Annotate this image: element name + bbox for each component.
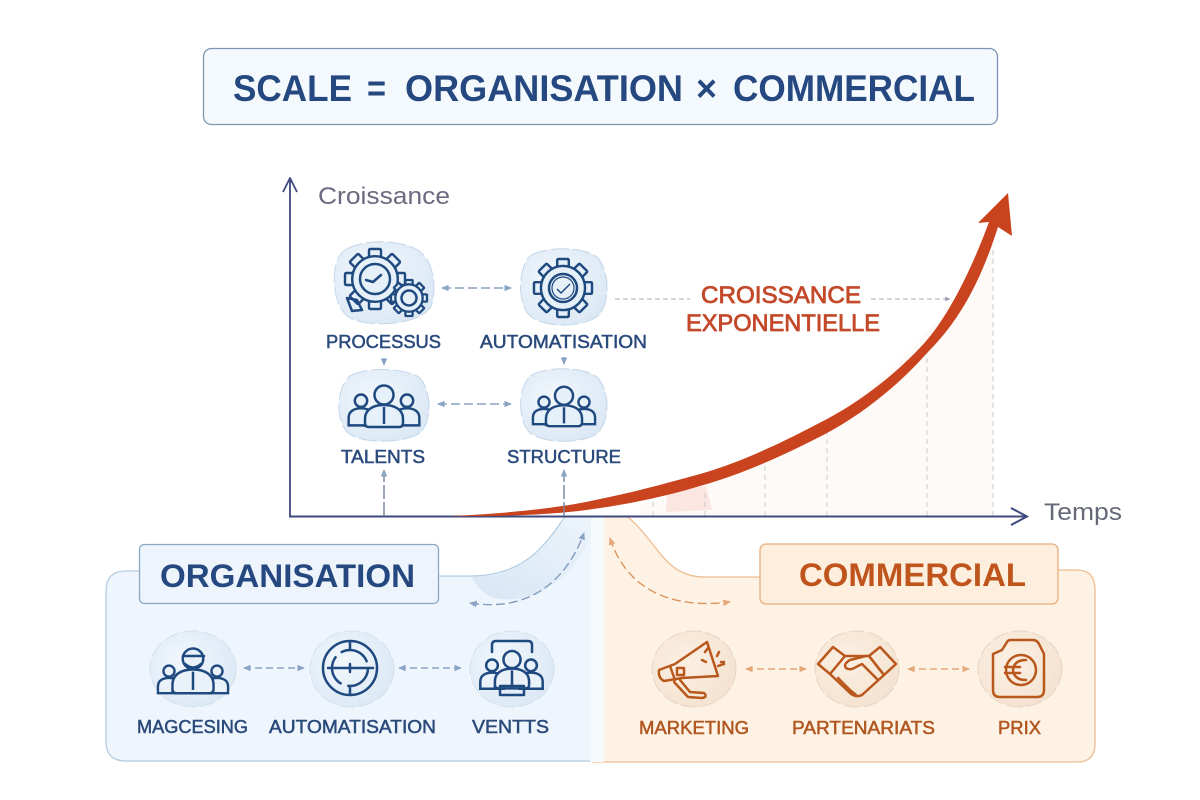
panel header: organisation: ORGANISATION bbox=[160, 558, 415, 594]
x axis bbox=[289, 508, 1027, 525]
panel: organisation outline bbox=[106, 517, 590, 761]
node: talents bbox=[339, 369, 429, 467]
chart: exponential growth bbox=[283, 178, 1122, 526]
item: partenariats bbox=[792, 631, 935, 738]
y axis bbox=[283, 178, 297, 517]
node: processus bbox=[326, 242, 441, 352]
label: AUTOMATISATION bbox=[480, 332, 647, 352]
title: ORGANISATION bbox=[405, 68, 683, 109]
title: = bbox=[367, 68, 386, 109]
label: TALENTS bbox=[341, 447, 425, 467]
label: PRIX bbox=[998, 718, 1041, 738]
node: structure bbox=[507, 369, 621, 467]
label: PROCESSUS bbox=[326, 332, 441, 352]
node: automatisation bbox=[480, 249, 647, 352]
label: MAGCESING bbox=[137, 717, 248, 737]
pink marker bbox=[666, 486, 712, 512]
strip between panels bbox=[591, 516, 604, 762]
curved arrow: commercial bbox=[610, 538, 730, 603]
curved arrow: organisation bbox=[470, 533, 584, 605]
panel: commercial outline bbox=[592, 517, 1095, 762]
time grid dashes bbox=[653, 245, 993, 516]
connector wedge: organisation to chart bbox=[472, 517, 591, 599]
title bbox=[204, 48, 998, 124]
arrows: commercial items bbox=[746, 668, 969, 670]
item: marcessing bbox=[137, 631, 248, 737]
panel: organisation background bbox=[106, 516, 591, 762]
x axis label: Temps bbox=[1044, 499, 1122, 526]
curve label bbox=[686, 282, 880, 337]
item: automatisation bbox=[269, 631, 436, 737]
panel header: organisation bbox=[140, 544, 438, 604]
arrows between chart nodes bbox=[384, 288, 564, 516]
label: VENTTS bbox=[472, 717, 549, 737]
title: COMMERCIAL bbox=[733, 68, 975, 109]
curve label: EXPONENTIELLE bbox=[686, 310, 880, 337]
growth curve arrow bbox=[450, 193, 1012, 516]
panel: commercial background bbox=[590, 516, 1095, 762]
item: prix bbox=[978, 631, 1062, 738]
panel header: commercial bbox=[760, 544, 1058, 604]
curve label: CROISSANCE bbox=[701, 282, 861, 309]
y axis label: Croissance bbox=[318, 183, 450, 210]
title: SCALE bbox=[233, 68, 352, 109]
label: MARKETING bbox=[639, 718, 749, 738]
title: × bbox=[696, 68, 717, 109]
item: ventes bbox=[470, 631, 554, 737]
arrows: organisation items bbox=[244, 667, 461, 669]
area under curve bbox=[640, 245, 993, 516]
label: AUTOMATISATION bbox=[269, 717, 436, 737]
panel header: commercial: COMMERCIAL bbox=[799, 557, 1026, 593]
dashed leaders to curve bbox=[615, 298, 950, 300]
label: STRUCTURE bbox=[507, 447, 621, 467]
label: PARTENARIATS bbox=[792, 718, 935, 738]
item: marketing bbox=[639, 631, 749, 738]
